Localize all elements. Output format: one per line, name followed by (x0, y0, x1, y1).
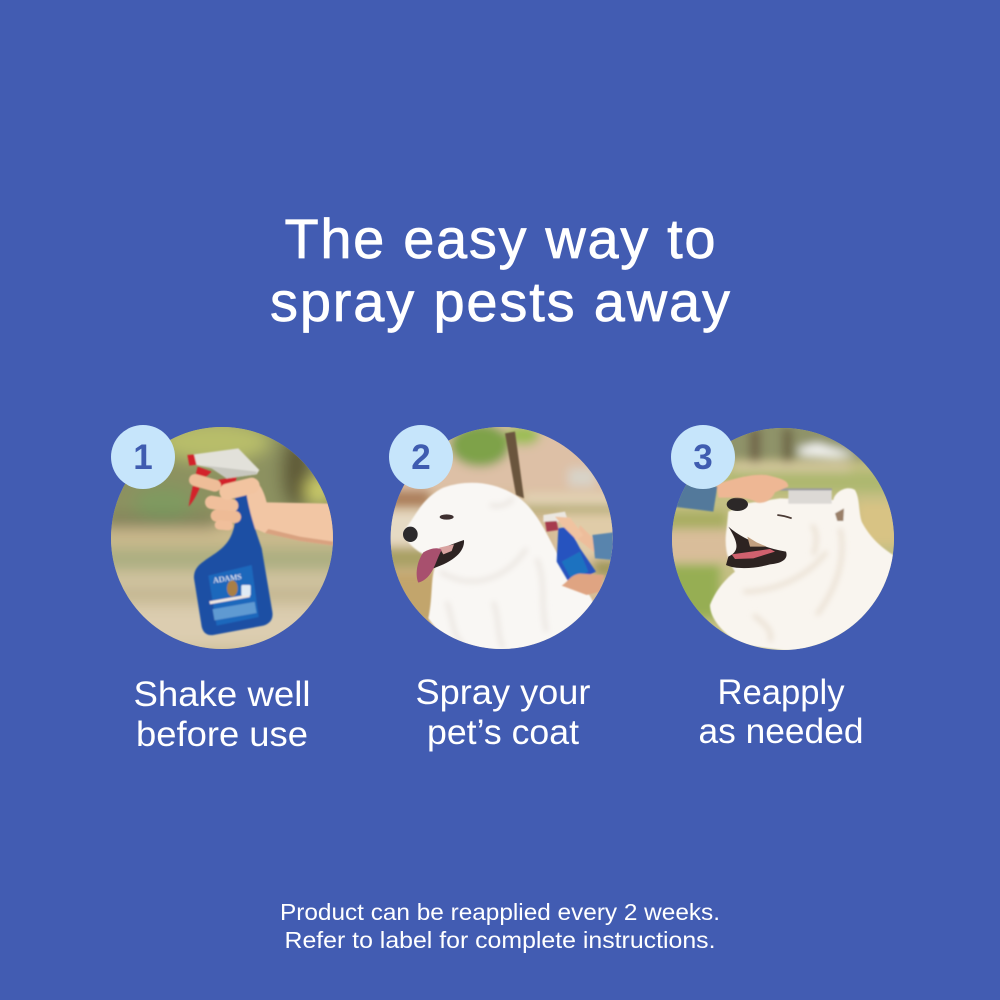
bottle label name: ADAMS (212, 572, 242, 585)
step 3 caption: Reapply (718, 672, 845, 712)
sprayer head (194, 448, 259, 478)
footnote: Product can be reapplied every 2 weeks. (280, 899, 720, 925)
bottle (194, 495, 273, 635)
fur shading (743, 525, 842, 642)
dog (403, 483, 593, 652)
dog (710, 488, 893, 652)
step 1 number badge: 1 (133, 438, 153, 477)
comb (673, 475, 832, 512)
step 2 caption: pet’s coat (427, 712, 579, 752)
hand and sleeve (717, 475, 788, 503)
arm (246, 485, 333, 542)
fur shading (440, 498, 547, 648)
nose, eye, mouth (727, 498, 748, 511)
step 1 caption (134, 674, 310, 754)
title: The easy way to (284, 207, 716, 270)
step 1 photo: hand holding spray bottle (111, 427, 333, 649)
step 2 caption (416, 672, 591, 752)
step 3 caption (698, 672, 864, 751)
step 2 photo: spraying white dog (390, 427, 613, 649)
step 2 number badge: 2 (411, 438, 431, 477)
step 2 caption: Spray your (416, 672, 591, 712)
footnote: Refer to label for complete instructions. (284, 927, 716, 953)
step 1 caption: before use (136, 714, 308, 754)
step 3 caption: as needed (698, 711, 864, 751)
face (403, 527, 418, 542)
trigger (187, 454, 199, 466)
step 3 number badge: 3 (693, 438, 713, 477)
bottle and hands (543, 512, 613, 595)
title: spray pests away (270, 270, 730, 333)
step 1 number badge (111, 425, 175, 489)
step 1 caption: Shake well (134, 674, 310, 714)
step 3 number badge (671, 425, 735, 489)
step 2 number badge (389, 425, 453, 489)
title (270, 207, 730, 333)
footnote (280, 899, 720, 953)
fingers and thumb (195, 480, 252, 526)
step 3 photo: combing white dog (672, 428, 894, 650)
